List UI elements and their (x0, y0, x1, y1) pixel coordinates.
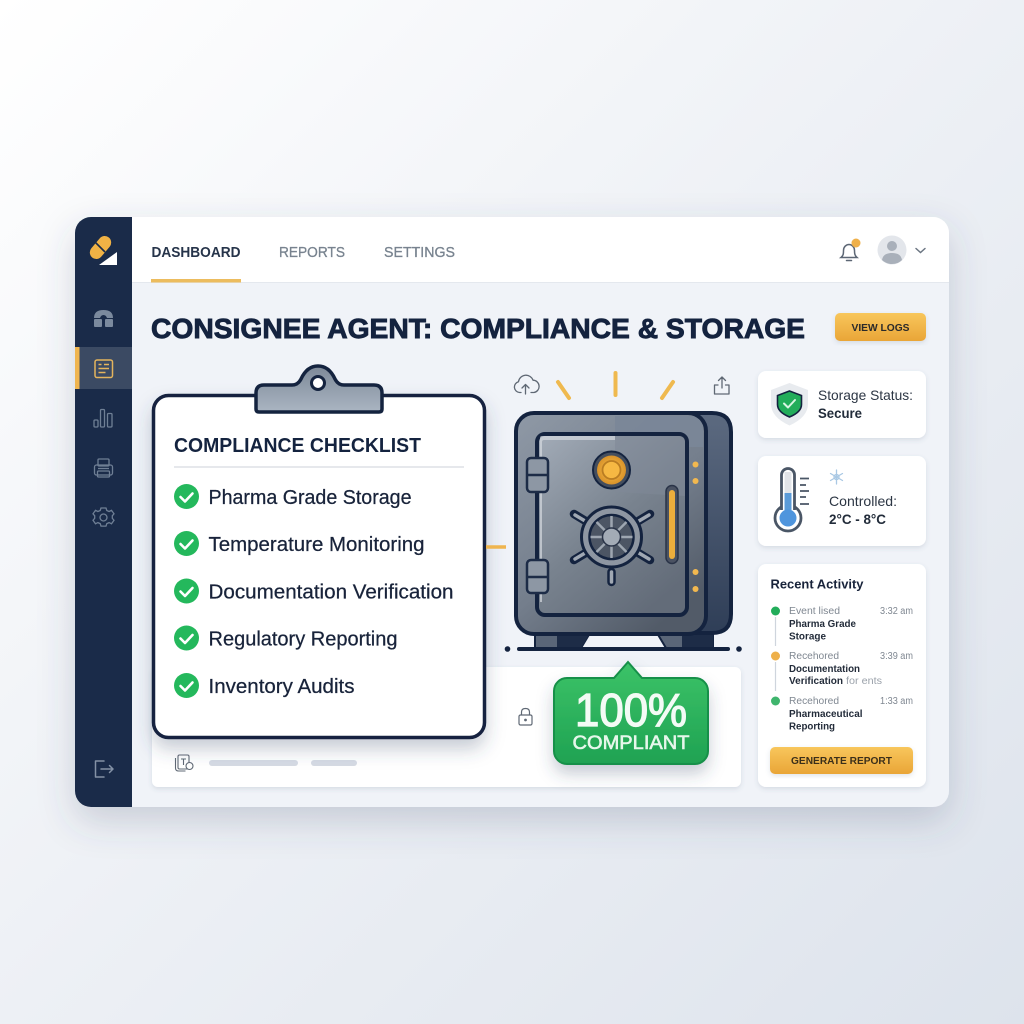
safe door (537, 434, 687, 615)
checklist item: inventory audits: Inventory Audits (208, 676, 354, 698)
panel: storage status (758, 371, 926, 438)
checklist item: inventory audits (174, 673, 354, 698)
panel: storage status: Secure (818, 405, 862, 421)
icon: printer (94, 459, 112, 477)
icon: snowflake (830, 470, 842, 484)
checklist item: regulatory reporting: Regulatory Reporting (208, 628, 398, 650)
highlight rays (558, 373, 673, 398)
floor line (505, 646, 742, 652)
generate report button (770, 747, 913, 774)
activity item 2: Recehored (789, 651, 839, 662)
icon: log out (96, 761, 113, 777)
activity item 3: Recehored (789, 696, 839, 707)
badge: 100% compliant: 100% (575, 684, 687, 736)
activity item 2: Verification (789, 676, 843, 687)
activity item 2: for ents (846, 676, 882, 687)
activity item 1: Pharma Grade (789, 619, 856, 630)
activity item 2 (771, 651, 913, 687)
main heading: CONSIGNEE AGENT: COMPLIANCE & STORAGE (151, 313, 805, 344)
temperature text: Controlled: (829, 493, 897, 509)
safe front body (516, 413, 706, 634)
icon: home (94, 310, 113, 327)
badge: 100% compliant (554, 662, 708, 764)
icon: notification bell (841, 238, 860, 260)
icon: document search (176, 755, 193, 771)
activity item 3: Reporting (789, 722, 835, 732)
safe feet (535, 633, 713, 648)
activity item 1 (771, 606, 913, 642)
icon: user avatar (878, 236, 906, 264)
panel: recent activity (758, 564, 926, 787)
activity item 3 (771, 696, 913, 732)
logo: capsule and triangle (87, 233, 117, 265)
connector line (486, 545, 506, 549)
illustration: bank safe (505, 413, 742, 652)
generate report button: GENERATE REPORT (791, 755, 893, 767)
icon: bar chart (94, 410, 112, 427)
icon: dropdown chevron (916, 248, 925, 252)
lower status panel (152, 667, 741, 787)
icon: settings gear (93, 508, 114, 526)
activity item 1: 3:32 am (880, 606, 913, 617)
icon: padlock (519, 708, 532, 725)
panel: temperature: 2°C - 8°C (829, 512, 886, 527)
active nav item (75, 347, 132, 389)
storage status text: Storage Status: (818, 387, 913, 403)
door hinges (527, 458, 548, 593)
icon: share (714, 377, 729, 394)
checklist item: documentation verification: Documentation Verification (208, 582, 454, 604)
indicator lights (692, 462, 698, 592)
activity item 2: 3:39 am (880, 651, 913, 662)
activity item 1: Event lised (789, 606, 840, 617)
badge: 100% compliant: COMPLIANT (572, 732, 690, 754)
checklist item: pharma grade storage: Pharma Grade Storage (208, 487, 412, 509)
view logs button: VIEW LOGS (852, 322, 910, 334)
panel: temperature (758, 456, 926, 546)
checklist heading: COMPLIANCE CHECKLIST (174, 434, 421, 457)
nav tab: reports: REPORTS (279, 245, 345, 261)
safe side panel (680, 413, 731, 633)
icon: shield (771, 383, 808, 426)
nav tab: settings: SETTINGS (384, 245, 455, 261)
timeline connectors (774, 617, 776, 691)
panel: compliance checklist clipboard (154, 366, 484, 738)
top navigation bar (132, 217, 949, 282)
view logs button (835, 313, 926, 341)
icon: cloud upload (514, 375, 539, 394)
icon: thermometer (775, 469, 809, 531)
icon: document list (95, 360, 112, 378)
safe wheel (574, 507, 650, 582)
placeholder bars (209, 760, 357, 766)
combination dial (593, 452, 630, 488)
dashboard window (75, 217, 949, 807)
activity item 3: 1:33 am (880, 696, 913, 707)
activity item 1: Storage (789, 632, 826, 642)
activity item 3: Pharmaceutical (789, 709, 863, 720)
clipboard clip (256, 366, 382, 412)
active tab underline (151, 279, 241, 282)
activity item 2: Documentation (789, 664, 860, 675)
nav tab: dashboard: DASHBOARD (152, 245, 240, 261)
recent activity heading: Recent Activity (770, 576, 864, 592)
sidebar (75, 217, 132, 807)
checklist item: temperature monitoring: Temperature Monitoring (208, 534, 424, 556)
door handle bar (666, 486, 678, 564)
